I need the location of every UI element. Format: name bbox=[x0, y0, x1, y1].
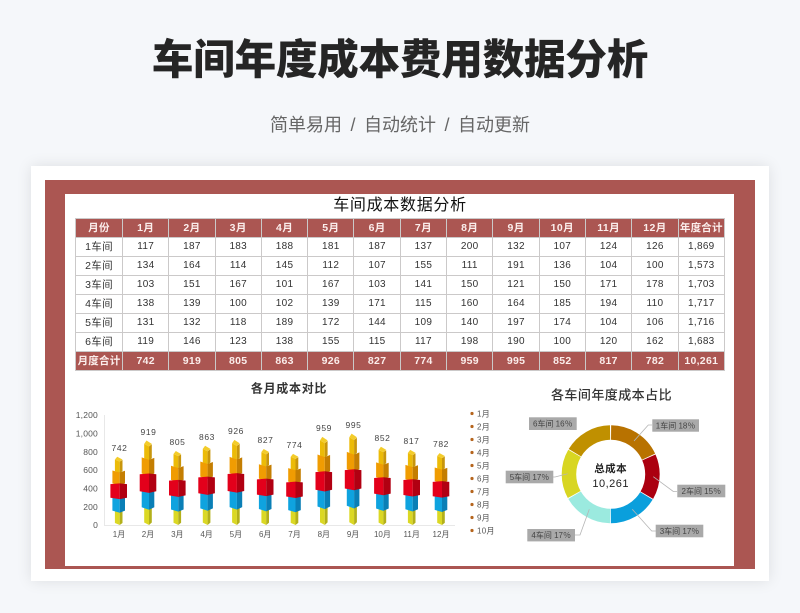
table total row: 852 bbox=[553, 355, 572, 367]
y axis labels: 400 bbox=[83, 484, 98, 494]
table header row: 112 bbox=[322, 260, 339, 271]
table total row: 805 bbox=[229, 355, 247, 367]
table total row: 995 bbox=[507, 355, 525, 367]
bars and value labels: 863 bbox=[199, 432, 215, 442]
table header row: 115 bbox=[415, 298, 432, 309]
legend bbox=[470, 410, 495, 536]
table header row: 172 bbox=[322, 317, 340, 328]
table header row: 171 bbox=[600, 279, 617, 290]
label: 3车间 bbox=[656, 525, 703, 537]
legend: 4月 bbox=[477, 448, 490, 458]
table header row: 141 bbox=[415, 279, 432, 290]
donut centre total bbox=[592, 462, 629, 490]
table header row: 139 bbox=[322, 298, 340, 309]
table header row: 104 bbox=[600, 260, 617, 271]
table header row: 164 bbox=[183, 260, 201, 271]
table header row: 114 bbox=[230, 260, 247, 271]
legend: 2月 bbox=[477, 422, 490, 432]
bars and value labels: 959 bbox=[316, 423, 332, 433]
table total row: 926 bbox=[322, 355, 340, 367]
table total row: 817 bbox=[599, 355, 618, 367]
table header row: 1月 bbox=[137, 222, 154, 234]
table total row: 774 bbox=[414, 355, 433, 367]
table header row: 103 bbox=[368, 279, 386, 290]
x axis labels: 1月 bbox=[113, 530, 125, 539]
y axis labels: 1,200 bbox=[76, 410, 98, 420]
bars and value labels: 774 bbox=[287, 440, 302, 450]
table header row: 140 bbox=[461, 317, 479, 328]
table header row: 104 bbox=[600, 317, 617, 328]
legend: 9月 bbox=[477, 514, 490, 522]
table header row: 1,573 bbox=[688, 260, 715, 271]
table header row: 194 bbox=[600, 298, 617, 309]
legend: 1月 bbox=[477, 410, 490, 418]
table header row: 118 bbox=[230, 317, 247, 328]
panel: white sheet bbox=[65, 194, 734, 566]
x axis labels: 9月 bbox=[347, 530, 359, 539]
table total row bbox=[76, 352, 724, 370]
x axis labels: 2月 bbox=[142, 530, 154, 539]
table header row: 月份 bbox=[88, 222, 110, 234]
table header row: 150 bbox=[554, 279, 571, 290]
table total row: 月度合计 bbox=[78, 355, 120, 367]
table header row: 155 bbox=[415, 260, 432, 271]
table header row: 1车间 bbox=[85, 241, 113, 253]
y axis labels: 800 bbox=[83, 447, 98, 457]
table header row: 107 bbox=[554, 241, 571, 252]
bars and value labels: 995 bbox=[346, 420, 361, 430]
table header row: 8月 bbox=[461, 222, 478, 234]
label: 2车间: 2车间 15％ bbox=[682, 486, 721, 496]
table header row: 132 bbox=[507, 241, 525, 252]
table header row: 178 bbox=[646, 279, 664, 290]
table header row: 100 bbox=[229, 298, 247, 309]
table header row: 183 bbox=[229, 241, 247, 252]
x axis labels: 7月 bbox=[288, 530, 301, 539]
table header row: 167 bbox=[229, 279, 247, 290]
table total row: 959 bbox=[461, 355, 479, 367]
table header row: 151 bbox=[183, 279, 201, 290]
table total row: 10,261 bbox=[684, 355, 718, 367]
table header row: 185 bbox=[554, 298, 571, 309]
bars and value labels: 926 bbox=[228, 426, 244, 436]
table header row: 167 bbox=[322, 279, 340, 290]
bars and value labels: 919 bbox=[141, 427, 156, 437]
table header row: 102 bbox=[276, 298, 293, 309]
table header row: 1,683 bbox=[688, 336, 715, 347]
label: 6车间: 6车间 16％ bbox=[533, 419, 573, 429]
table header row: 106 bbox=[646, 317, 664, 328]
table header row: 101 bbox=[276, 279, 293, 290]
table header row: 188 bbox=[276, 241, 293, 252]
table header row: 1,703 bbox=[688, 279, 715, 290]
bars and value labels: 852 bbox=[375, 433, 390, 443]
label: 2车间 bbox=[677, 485, 725, 497]
title: 车间年度成本费用数据分析 bbox=[152, 36, 648, 83]
table header row: 115 bbox=[369, 336, 386, 347]
y axis labels bbox=[76, 410, 98, 530]
table total row: 863 bbox=[275, 355, 294, 367]
table header row: 10月 bbox=[551, 222, 574, 234]
x axis labels: 11月 bbox=[404, 530, 420, 539]
table header row: 3车间 bbox=[85, 279, 113, 291]
donut centre total: 10,261 bbox=[592, 478, 629, 490]
bars and value labels bbox=[110, 420, 449, 525]
y axis labels: 0 bbox=[93, 520, 98, 530]
table header row: 137 bbox=[415, 241, 432, 252]
bars and value labels: 805 bbox=[170, 437, 185, 447]
table header row: 6车间 bbox=[85, 336, 113, 348]
x axis labels: 6月 bbox=[259, 530, 271, 539]
table header row: 121 bbox=[507, 279, 525, 290]
table header row: 139 bbox=[183, 298, 201, 309]
table header row: 197 bbox=[507, 317, 525, 328]
table header row: 3月 bbox=[230, 222, 247, 234]
table total row: 742 bbox=[136, 355, 155, 367]
donut chart: workshop share bbox=[506, 417, 725, 541]
table header row: 100 bbox=[554, 336, 571, 347]
table header row bbox=[76, 219, 724, 370]
table header row: 191 bbox=[507, 260, 525, 271]
table header row: 5月 bbox=[322, 222, 339, 234]
label: 5车间: 5车间 17％ bbox=[510, 472, 549, 482]
table header row: 6月 bbox=[369, 222, 386, 234]
x axis labels: 10月 bbox=[374, 530, 391, 539]
bar chart: monthly cost bbox=[76, 410, 455, 539]
table header row: 131 bbox=[137, 317, 154, 328]
table header row: 150 bbox=[461, 279, 479, 290]
table header row: 年度合计 bbox=[680, 222, 723, 234]
table header row: 136 bbox=[554, 260, 571, 271]
table header row: 164 bbox=[507, 298, 525, 309]
x axis labels bbox=[113, 530, 449, 539]
donut centre total: 总成本 bbox=[594, 462, 627, 475]
heading: monthly cost chart: 各月成本对比 bbox=[251, 380, 327, 396]
heading: workshop share chart: 各车间年度成本占比 bbox=[551, 388, 672, 402]
x axis labels: 4月 bbox=[200, 530, 213, 539]
table header row: 2车间 bbox=[85, 260, 113, 272]
table header row: 11月 bbox=[597, 222, 620, 234]
table header row: 124 bbox=[600, 241, 617, 252]
table header row: 4月 bbox=[276, 222, 293, 234]
table header row: 132 bbox=[183, 317, 201, 328]
subtitle: 简单易用 / 自动统计 / 自动更新 bbox=[270, 115, 530, 135]
table header row: 123 bbox=[229, 336, 247, 347]
table header row: 160 bbox=[461, 298, 479, 309]
table header row: 103 bbox=[137, 279, 154, 290]
table header row: 145 bbox=[276, 260, 293, 271]
x axis labels: 8月 bbox=[318, 530, 330, 539]
table header row: 2月 bbox=[183, 222, 201, 234]
legend: 5月 bbox=[477, 462, 490, 470]
y axis labels: 600 bbox=[83, 465, 98, 475]
table header row: 198 bbox=[461, 336, 479, 347]
table header row: 111 bbox=[462, 260, 478, 271]
legend: 10月 bbox=[477, 526, 495, 536]
y axis labels: 1,000 bbox=[76, 428, 98, 438]
table header row: 187 bbox=[183, 241, 201, 252]
legend: 3月 bbox=[477, 436, 490, 444]
table header row: 155 bbox=[322, 336, 340, 347]
table header row: 134 bbox=[137, 260, 154, 271]
table header row: 190 bbox=[507, 336, 525, 347]
bars and value labels: 827 bbox=[258, 435, 273, 445]
table header row: 4车间 bbox=[85, 298, 113, 310]
table header row: 162 bbox=[646, 336, 664, 347]
table header row: 110 bbox=[646, 298, 663, 309]
legend: 7月 bbox=[477, 488, 490, 496]
table total row: 782 bbox=[646, 355, 664, 367]
sheet heading: 车间成本数据分析 bbox=[333, 197, 467, 214]
table header row: 181 bbox=[322, 241, 340, 252]
table header row: 187 bbox=[368, 241, 386, 252]
legend: 6月 bbox=[477, 474, 490, 484]
y axis labels: 200 bbox=[83, 502, 98, 512]
table header row: 100 bbox=[646, 260, 664, 271]
table header row: 144 bbox=[368, 317, 386, 328]
bars and value labels: 817 bbox=[404, 436, 419, 446]
data table bbox=[75, 218, 725, 371]
table header row: 119 bbox=[137, 336, 154, 347]
label: 6车间 bbox=[529, 417, 577, 430]
table header row: 126 bbox=[646, 241, 664, 252]
label: 4车间: 4车间 17％ bbox=[531, 530, 571, 540]
bars and value labels: 782 bbox=[433, 439, 449, 449]
table header row: 5车间 bbox=[85, 317, 113, 329]
label: 3车间: 3车间 17％ bbox=[660, 526, 699, 536]
table header row: 1,716 bbox=[688, 317, 715, 328]
table header row: 117 bbox=[137, 241, 154, 252]
table header row: 12月 bbox=[643, 222, 667, 234]
x axis labels: 12月 bbox=[433, 530, 449, 539]
leader lines bbox=[553, 425, 677, 535]
panel: spreadsheet card bbox=[31, 166, 769, 581]
table header row: 171 bbox=[368, 298, 386, 309]
table header row: 146 bbox=[183, 336, 201, 347]
table header row: 200 bbox=[461, 241, 479, 252]
bars and value labels: 742 bbox=[112, 443, 127, 453]
table header row: 1,869 bbox=[688, 241, 715, 252]
table header row: 138 bbox=[276, 336, 293, 347]
table header row: 120 bbox=[600, 336, 617, 347]
panel: maroon frame bbox=[45, 180, 755, 569]
label: 1车间: 1车间 18％ bbox=[656, 420, 695, 430]
x axis labels: 5月 bbox=[230, 530, 242, 539]
table header row: 189 bbox=[276, 317, 293, 328]
label: 5车间 bbox=[506, 471, 553, 483]
table total row: 919 bbox=[183, 355, 201, 367]
table header row: 1,717 bbox=[688, 298, 715, 309]
table header row: 117 bbox=[415, 336, 432, 347]
table header row: 174 bbox=[554, 317, 571, 328]
table header row: 107 bbox=[368, 260, 386, 271]
label: 1车间 bbox=[652, 419, 699, 432]
label: 4车间 bbox=[527, 529, 575, 541]
table header row: 9月 bbox=[507, 222, 525, 234]
table header row: 138 bbox=[137, 298, 154, 309]
x axis labels: 3月 bbox=[171, 530, 184, 539]
table total row: 827 bbox=[368, 355, 386, 367]
legend: 8月 bbox=[477, 500, 490, 510]
table header row: 109 bbox=[415, 317, 432, 328]
table header row: 7月 bbox=[415, 222, 432, 234]
